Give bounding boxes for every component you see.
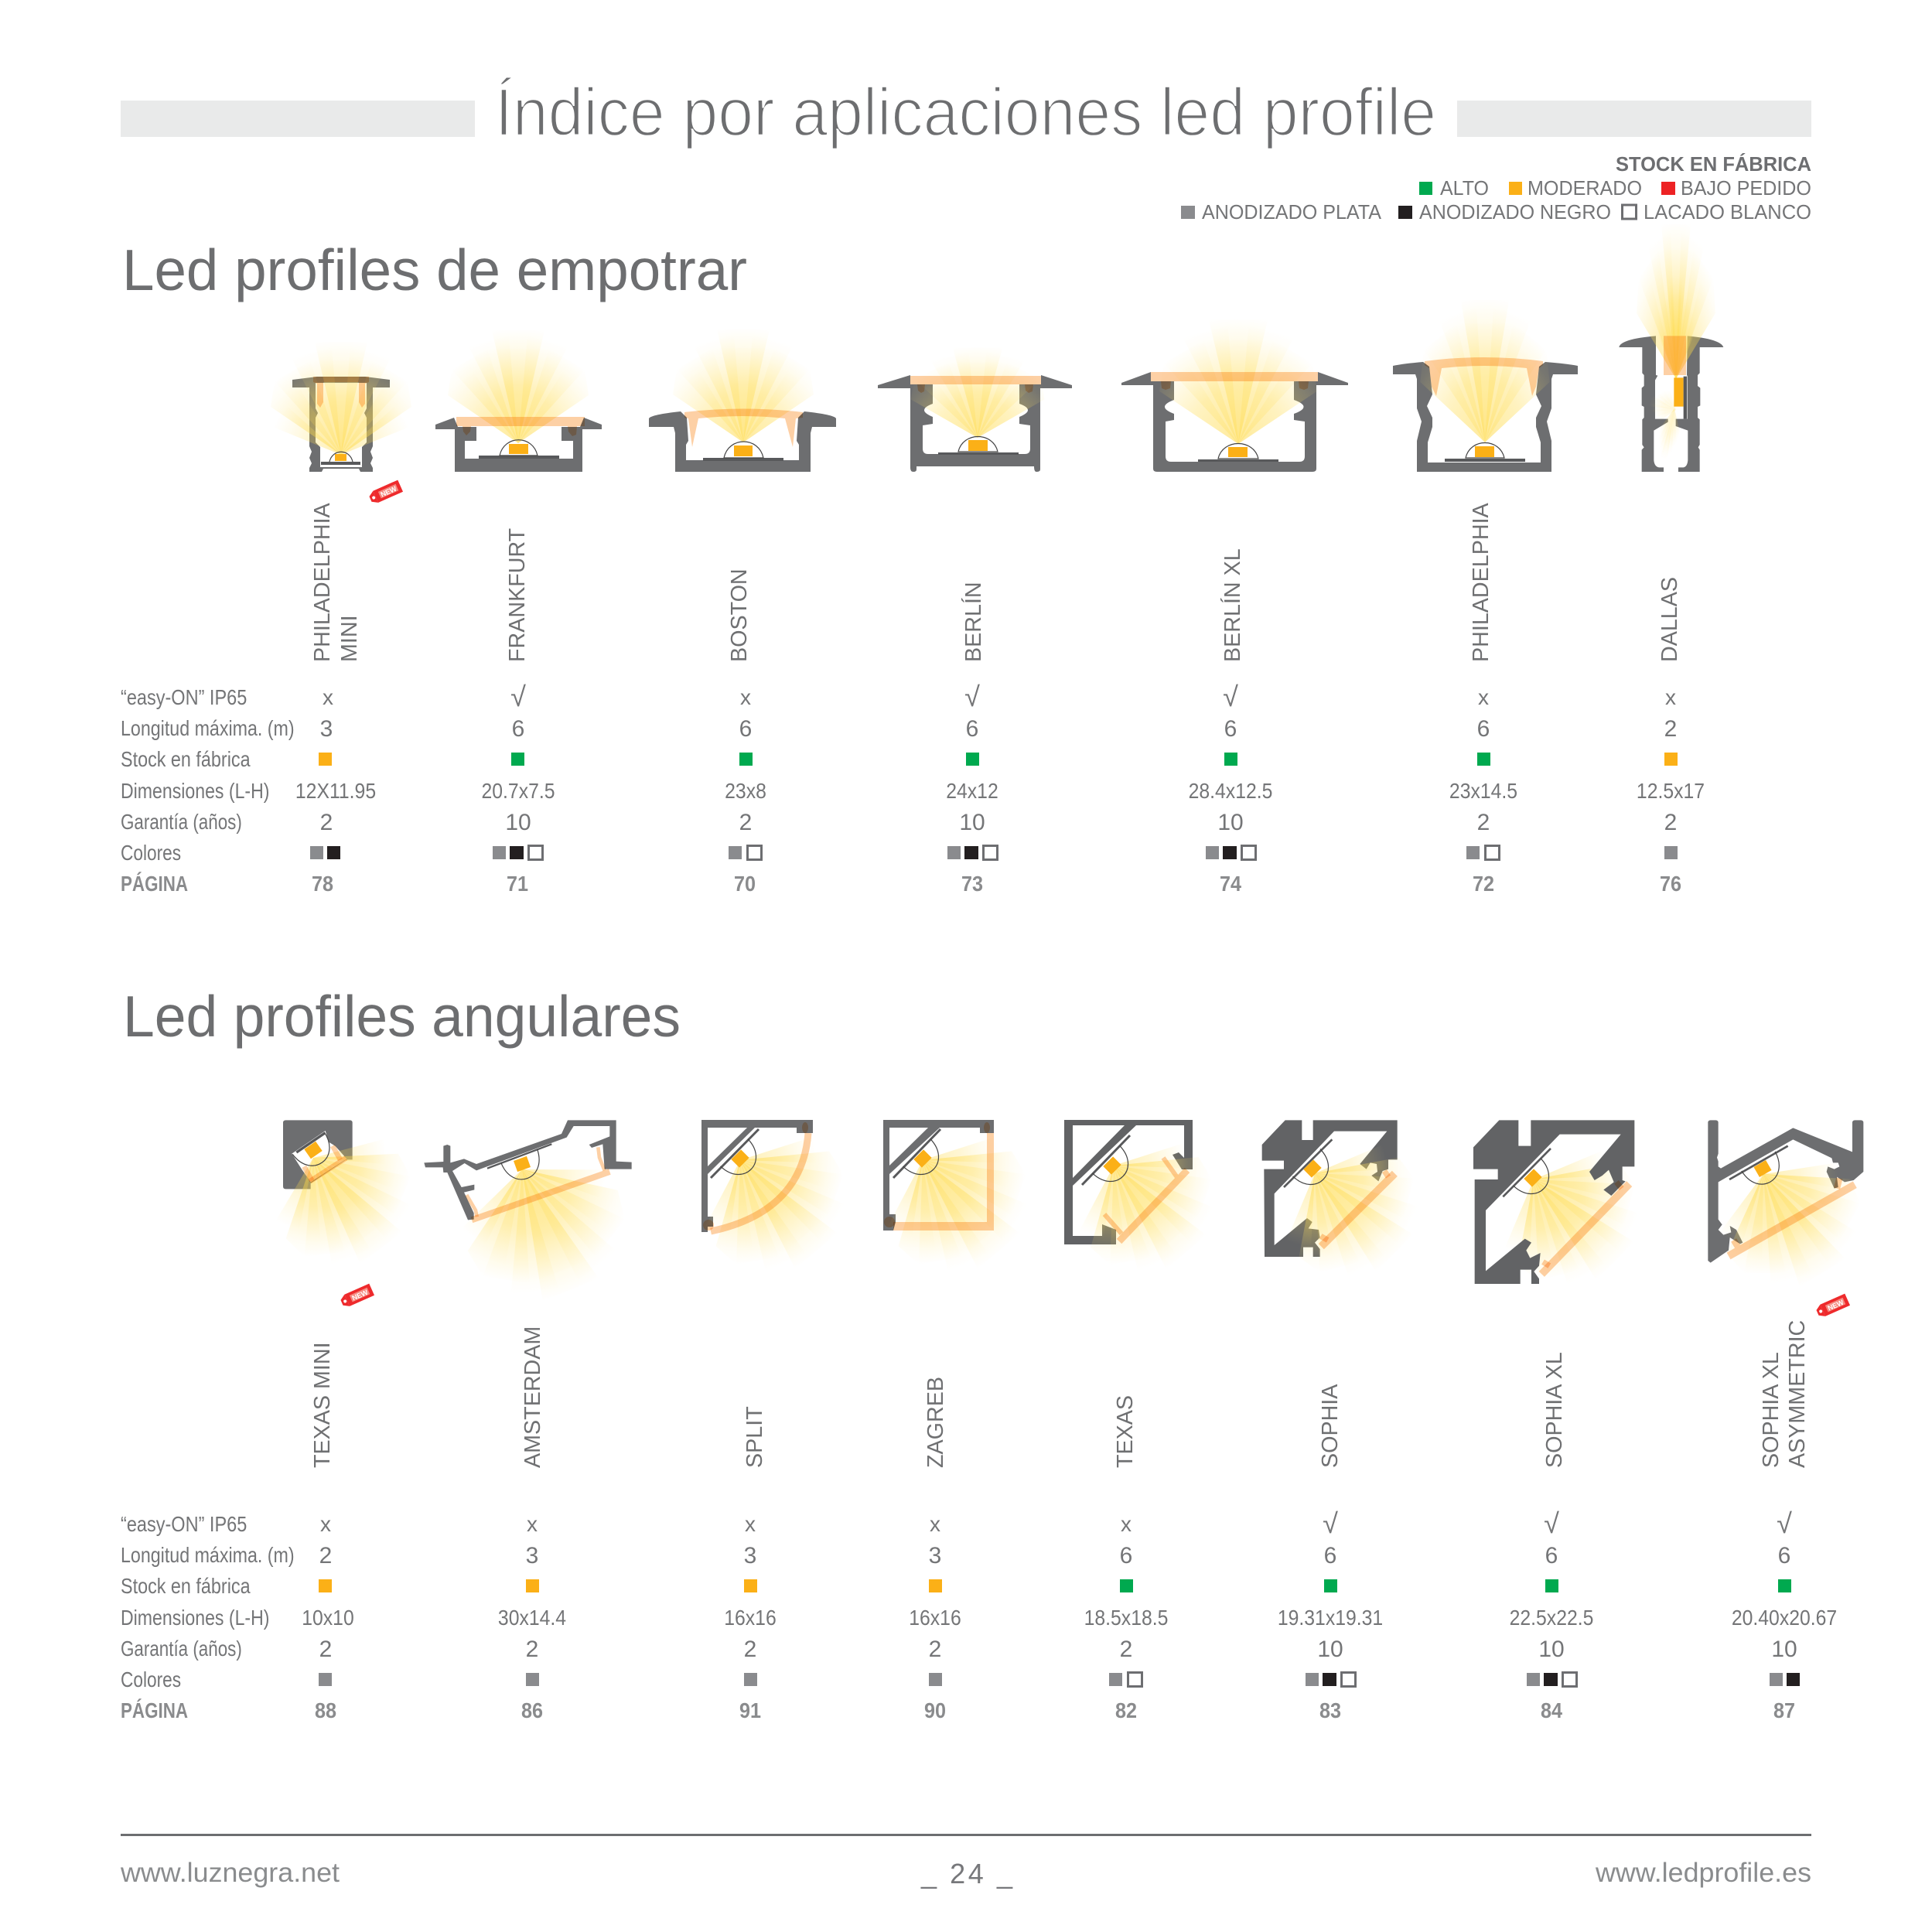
product names: BERLÍN	[961, 582, 986, 662]
row: easy-ON: x	[1665, 685, 1676, 709]
page number: _ 24 _	[920, 1858, 1013, 1889]
row: página: 84	[1541, 1698, 1562, 1722]
icon: Amsterdam	[424, 1120, 646, 1320]
icon: new tag	[340, 1284, 374, 1309]
product names: SOPHIA XL	[1759, 1352, 1784, 1468]
row: longitud: 6	[1224, 716, 1237, 742]
row: dimensiones: 12X11.95	[295, 779, 376, 803]
row: easy-ON: x	[1121, 1512, 1132, 1536]
row: garantía: 10	[1217, 810, 1244, 835]
icon: Sophia XL Asymmetric	[1702, 1120, 1884, 1309]
heading: angulares: Led profiles angulares	[123, 984, 681, 1049]
row: longitud: 3	[526, 1543, 538, 1568]
row: longitud: 6	[1477, 716, 1490, 742]
row: longitud: 2	[1664, 716, 1677, 742]
row: dimensiones	[302, 1606, 1837, 1630]
row: longitud	[319, 1543, 1790, 1568]
row: dimensiones: 23x8	[725, 779, 766, 803]
row: página	[312, 872, 1681, 896]
row: easy-ON: x	[745, 1512, 756, 1536]
row: garantía	[320, 810, 1677, 835]
footer right url: www.ledprofile.es	[1595, 1858, 1811, 1888]
row: página: 82	[1115, 1698, 1137, 1722]
row: garantía: 2	[744, 1637, 756, 1662]
row: easy-ON: √	[1777, 1507, 1792, 1539]
product names: MINI	[337, 615, 362, 662]
row: longitud: 6	[966, 716, 978, 742]
legend stock levels: BAJO PEDIDO	[1681, 176, 1811, 200]
icon: Texas Mini	[257, 1115, 438, 1290]
product names: TEXAS MINI	[310, 1342, 335, 1468]
row: dimensiones: 16x16	[909, 1606, 961, 1630]
legend	[1181, 153, 1811, 224]
row: dimensiones: 28.4x12.5	[1189, 779, 1272, 803]
row labels: Colores	[121, 1668, 181, 1692]
legend stock levels	[1419, 176, 1811, 200]
row: longitud: 6	[1324, 1543, 1336, 1568]
row: longitud: 6	[739, 716, 752, 742]
row labels: Stock en fábrica	[121, 748, 251, 772]
row: easy-ON	[323, 681, 1676, 712]
row: longitud: 3	[929, 1543, 941, 1568]
row: dimensiones: 16x16	[724, 1606, 777, 1630]
row: colores	[310, 846, 1678, 860]
row: easy-ON: √	[1323, 1507, 1338, 1539]
row: página: 91	[739, 1698, 761, 1722]
legend colours: ANODIZADO NEGRO	[1419, 200, 1611, 224]
legend heading: STOCK EN FÁBRICA	[1616, 153, 1811, 176]
row labels: Stock en fábrica	[121, 1575, 251, 1599]
row labels: Colores	[121, 841, 181, 865]
row: garantía: 10	[505, 810, 531, 835]
row: garantía: 10	[959, 810, 985, 835]
row: garantía: 10	[1771, 1637, 1797, 1662]
legend colours: ANODIZADO PLATA	[1202, 200, 1382, 224]
row: dimensiones: 23x14.5	[1449, 779, 1517, 803]
legend stock levels: ALTO	[1440, 176, 1489, 200]
icon: Philadelphia Mini	[271, 342, 411, 472]
title: Índice por aplicaciones led profile	[495, 75, 1436, 150]
product names: ASYMMETRIC	[1785, 1320, 1810, 1468]
row: página: 73	[961, 872, 983, 896]
row: dimensiones: 20.7x7.5	[481, 779, 555, 803]
row: página: 87	[1773, 1698, 1795, 1722]
row: longitud: 6	[1545, 1543, 1558, 1568]
row: página: 72	[1473, 872, 1494, 896]
row: página: 88	[315, 1698, 336, 1722]
product names: PHILADELPHIA	[1469, 502, 1493, 662]
icon: Sophia	[1262, 1120, 1445, 1303]
product names: SOPHIA XL	[1542, 1352, 1567, 1468]
icon: Berlín XL	[1121, 319, 1348, 472]
row: garantía: 2	[320, 810, 333, 835]
row: easy-ON	[320, 1507, 1792, 1539]
row: página: 78	[312, 872, 333, 896]
row: garantía: 2	[739, 810, 752, 835]
row: página: 76	[1660, 872, 1681, 896]
icon: Philadelphia	[1393, 300, 1578, 472]
row: garantía: 2	[319, 1637, 332, 1662]
row: dimensiones	[295, 779, 1705, 803]
icon: new tag	[368, 480, 403, 505]
row: dimensiones: 10x10	[302, 1606, 354, 1630]
row: colores	[319, 1672, 1800, 1686]
row: longitud: 6	[512, 716, 524, 742]
icon: Zagreb	[866, 1113, 1056, 1299]
row: dimensiones: 12.5x17	[1637, 779, 1705, 803]
row: easy-ON: x	[740, 685, 751, 709]
product names	[310, 502, 1682, 662]
row: easy-ON: x	[930, 1512, 940, 1536]
row labels: Dimensiones (L-H)	[121, 780, 269, 804]
icon: Texas	[1060, 1120, 1241, 1297]
row: dimensiones: 24x12	[946, 779, 998, 803]
row: longitud: 3	[320, 716, 333, 742]
product names: BERLÍN XL	[1220, 548, 1245, 662]
product names: AMSTERDAM	[521, 1326, 545, 1468]
icon: new tag	[1815, 1294, 1850, 1319]
product names: TEXAS	[1113, 1395, 1138, 1468]
icon: Sophia XL	[1473, 1120, 1666, 1312]
row: garantía: 2	[1120, 1637, 1132, 1662]
row: easy-ON: √	[964, 681, 980, 712]
row: página	[315, 1698, 1795, 1722]
product names: ZAGREB	[923, 1377, 948, 1468]
table: angulares	[121, 1320, 1837, 1723]
row labels: PÁGINA	[121, 872, 188, 896]
row: garantía	[319, 1637, 1797, 1662]
product names: SPLIT	[742, 1406, 767, 1468]
row: stock	[319, 753, 1678, 766]
legend colours	[1181, 200, 1811, 224]
row labels: Dimensiones (L-H)	[121, 1606, 269, 1630]
row: dimensiones: 19.31x19.31	[1278, 1606, 1383, 1630]
row: garantía: 10	[1317, 1637, 1343, 1662]
row: easy-ON: x	[323, 685, 333, 709]
icon: Berlín	[878, 347, 1072, 472]
product names: SOPHIA	[1318, 1384, 1343, 1468]
row labels: “easy-ON” IP65	[121, 1513, 247, 1536]
row labels: Longitud máxima. (m)	[121, 1544, 295, 1568]
footer left url: www.luznegra.net	[120, 1858, 340, 1888]
row: garantía: 10	[1538, 1637, 1565, 1662]
icon: Boston	[649, 329, 836, 472]
row: easy-ON: x	[320, 1512, 331, 1536]
product names	[310, 1320, 1810, 1468]
icon: Split	[684, 1113, 873, 1299]
row: stock	[319, 1579, 1791, 1592]
row: longitud: 2	[319, 1543, 332, 1568]
row: garantía: 2	[1664, 810, 1677, 835]
table: empotrar	[121, 502, 1705, 896]
heading: empotrar: Led profiles de empotrar	[122, 237, 747, 302]
row: página: 86	[521, 1698, 543, 1722]
row labels: Garantía (años)	[121, 811, 242, 835]
row: página: 90	[924, 1698, 946, 1722]
row: garantía: 2	[929, 1637, 941, 1662]
header bar left	[121, 101, 475, 137]
legend colours: LACADO BLANCO	[1644, 200, 1811, 224]
row: longitud: 6	[1120, 1543, 1132, 1568]
row: página: 70	[734, 872, 756, 896]
row: easy-ON: x	[527, 1512, 538, 1536]
row: easy-ON: √	[1544, 1507, 1559, 1539]
row: easy-ON: √	[1223, 681, 1238, 712]
row: página: 83	[1319, 1698, 1341, 1722]
row labels: “easy-ON” IP65	[121, 686, 247, 709]
row: longitud: 6	[1778, 1543, 1790, 1568]
row: página: 71	[507, 872, 528, 896]
row: dimensiones: 20.40x20.67	[1732, 1606, 1837, 1630]
icon: Frankfurt	[435, 330, 602, 472]
row labels: Garantía (años)	[121, 1637, 242, 1661]
row labels	[121, 686, 295, 896]
icon: Dallas	[1619, 224, 1723, 472]
row: longitud	[320, 716, 1677, 742]
product names: PHILADELPHIA	[310, 502, 335, 662]
legend stock levels: MODERADO	[1528, 176, 1642, 200]
row labels: Longitud máxima. (m)	[121, 717, 295, 741]
row: easy-ON: √	[510, 681, 526, 712]
product names: DALLAS	[1657, 577, 1682, 662]
product names: BOSTON	[727, 568, 752, 662]
product names: FRANKFURT	[505, 528, 530, 662]
row: longitud: 3	[744, 1543, 756, 1568]
row labels: PÁGINA	[121, 1698, 188, 1723]
row: dimensiones: 18.5x18.5	[1084, 1606, 1168, 1630]
row: dimensiones: 22.5x22.5	[1510, 1606, 1593, 1630]
header bar right	[1457, 101, 1811, 137]
row: garantía: 2	[526, 1637, 538, 1662]
row labels	[121, 1513, 295, 1723]
row: página: 74	[1220, 872, 1241, 896]
row: dimensiones: 30x14.4	[498, 1606, 566, 1630]
row: garantía: 2	[1477, 810, 1490, 835]
row: easy-ON: x	[1478, 685, 1489, 709]
